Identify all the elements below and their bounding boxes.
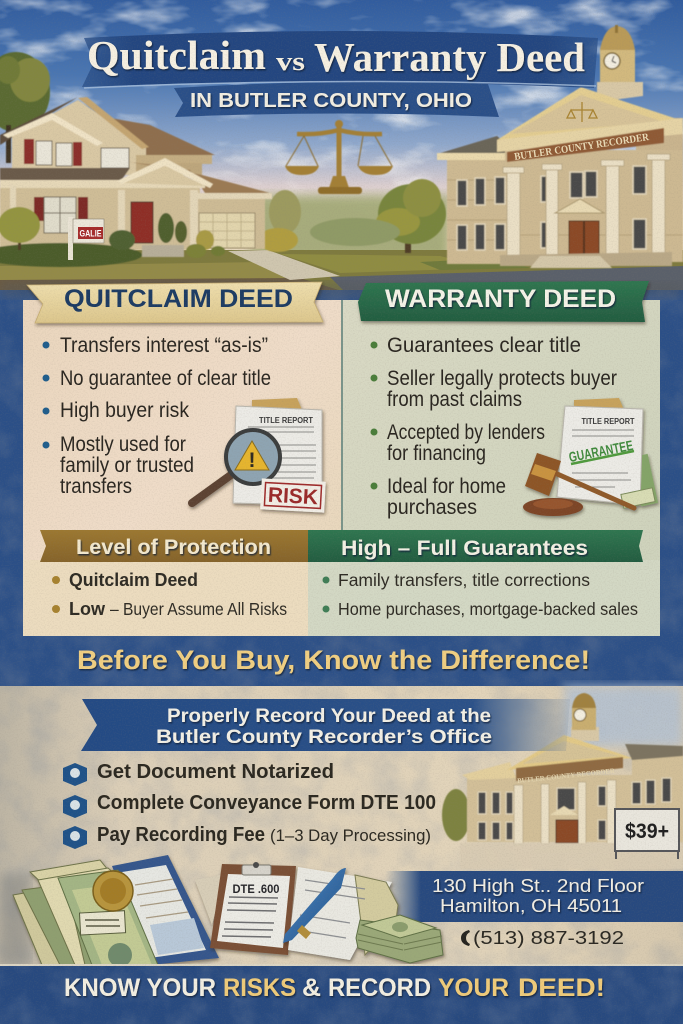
steps list: Pay Recording Fee bbox=[97, 824, 265, 846]
quitclaim bullet list: No guarantee of clear title bbox=[60, 367, 271, 390]
warranty bullet list: Guarantees clear title bbox=[387, 334, 581, 357]
small courthouse illustration bbox=[442, 693, 683, 869]
protection table bbox=[23, 530, 660, 636]
for sale sign bbox=[68, 217, 104, 260]
quitclaim bullet list: transfers bbox=[60, 475, 132, 498]
warranty bullet list bbox=[370, 334, 617, 519]
ribbon: quitclaim deed heading: QUITCLAIM DEED bbox=[64, 285, 293, 313]
quitclaim protection list bbox=[52, 570, 287, 619]
warranty protection list: Family transfers, title corrections bbox=[338, 570, 590, 590]
address band: 130 High St.. 2nd Floor bbox=[432, 876, 644, 896]
quitclaim bullet list: Mostly used for bbox=[60, 433, 186, 456]
panel: warranty deed bbox=[341, 300, 660, 636]
steps list bbox=[63, 761, 436, 849]
icon: step badge bbox=[63, 763, 87, 786]
steps list: Get Document Notarized bbox=[97, 761, 334, 783]
background tree right bbox=[258, 179, 446, 253]
address band bbox=[385, 871, 683, 922]
quitclaim protection list: Quitclaim Deed bbox=[69, 570, 198, 590]
call to action text: & bbox=[302, 974, 321, 1002]
illustration: title report with guarantee and gavel: TITLE REPORT bbox=[582, 417, 635, 426]
right cell lower background bbox=[308, 560, 660, 636]
call to action text: YOUR bbox=[438, 974, 509, 1002]
illustration: title report with magnifier and risk stamp: ! bbox=[248, 449, 256, 472]
title text: Warranty Deed bbox=[314, 34, 585, 80]
title text: Quitclaim bbox=[87, 32, 266, 78]
warranty bullet list: purchases bbox=[387, 496, 477, 519]
steps list: (1–3 Day Processing) bbox=[270, 826, 431, 845]
ribbon: warranty deed heading bbox=[358, 281, 649, 322]
illustration: title report with magnifier and risk stamp: TITLE REPORT bbox=[259, 416, 313, 425]
tagline: Before You Buy, Know the Difference! bbox=[77, 645, 590, 675]
illustration: title report with guarantee and gavel bbox=[523, 398, 658, 516]
icon: scales of justice bbox=[285, 120, 393, 194]
subtitle banner bbox=[84, 81, 596, 117]
title text: vs bbox=[276, 47, 305, 76]
strip: level of protection: Level of Protection bbox=[76, 536, 271, 559]
ribbon: quitclaim deed heading bbox=[27, 282, 323, 323]
icon: step badge bbox=[63, 795, 87, 818]
illustration: clipboard with DTE form: DTE .600 bbox=[232, 884, 280, 896]
strip: high full guarantees bbox=[308, 530, 643, 562]
icon: step badge bbox=[63, 826, 87, 849]
warranty bullet list: for financing bbox=[387, 442, 486, 465]
call to action text: RISKS bbox=[223, 974, 296, 1002]
price sign bbox=[615, 809, 679, 859]
strip: high full guarantees: High – Full Guarantees bbox=[341, 537, 588, 560]
recorder banner bbox=[81, 699, 570, 751]
courthouse illustration bbox=[437, 25, 683, 268]
illustration: money, folder, coin bbox=[13, 855, 219, 967]
quitclaim protection list: Low bbox=[69, 599, 106, 619]
warranty bullet list: Seller legally protects buyer bbox=[387, 367, 617, 390]
quitclaim bullet list: Transfers interest “as-is” bbox=[60, 334, 268, 357]
illustration: clipboard with DTE form bbox=[195, 862, 296, 955]
warranty bullet list: Ideal for home bbox=[387, 475, 506, 498]
header scene: sky and landscape bbox=[0, 0, 683, 300]
background tree left bbox=[0, 52, 50, 163]
steps list: Complete Conveyance Form DTE 100 bbox=[97, 792, 436, 814]
left cell lower background bbox=[23, 560, 308, 636]
recorder banner: Butler County Recorder’s Office bbox=[156, 727, 492, 748]
recorder banner: Properly Record Your Deed at the bbox=[167, 706, 491, 727]
address band: Hamilton, OH 45011 bbox=[440, 896, 622, 916]
quitclaim protection list: – Buyer Assume All Risks bbox=[110, 599, 287, 619]
price sign: $39+ bbox=[625, 820, 669, 843]
warranty bullet list: from past claims bbox=[387, 388, 522, 411]
quitclaim bullet list: family or trusted bbox=[60, 454, 194, 477]
call to action text: KNOW YOUR bbox=[64, 974, 216, 1002]
call to action text bbox=[64, 974, 605, 1002]
illustration: papers, pen and cash bbox=[283, 867, 443, 963]
subtitle banner: IN BUTLER COUNTY, OHIO bbox=[190, 90, 472, 112]
small pediment sign: BUTLER COUNTY RECORDER bbox=[517, 767, 616, 785]
blue background behind comparison bbox=[0, 282, 683, 688]
lower parchment section bbox=[0, 686, 683, 968]
for sale sign: GALIE bbox=[80, 228, 102, 238]
warranty protection list: Home purchases, mortgage-backed sales bbox=[338, 599, 638, 619]
warranty protection list bbox=[322, 570, 638, 619]
illustration: title report with magnifier and risk stamp: RISK bbox=[267, 484, 318, 509]
pediment scales icon bbox=[567, 102, 597, 122]
quitclaim bullet list: High buyer risk bbox=[60, 399, 189, 422]
ribbon: warranty deed heading: WARRANTY DEED bbox=[385, 285, 616, 313]
title text bbox=[87, 32, 585, 80]
warranty bullet list: Accepted by lenders bbox=[387, 421, 545, 444]
strip: level of protection bbox=[40, 530, 308, 562]
quitclaim bullet list bbox=[42, 334, 271, 498]
illustration: title report with guarantee and gavel: GUARANTEE bbox=[567, 437, 634, 465]
title banner bbox=[82, 31, 598, 88]
call to action text: RECORD bbox=[328, 974, 431, 1002]
courthouse sign: BUTLER COUNTY RECORDER bbox=[514, 132, 650, 163]
bottom call to action band bbox=[0, 964, 683, 1024]
phone number: (513) 887-3192 bbox=[473, 928, 624, 948]
call to action text: DEED! bbox=[518, 974, 605, 1002]
panel: quitclaim deed bbox=[23, 300, 342, 636]
illustration: title report with magnifier and risk stamp bbox=[192, 398, 326, 513]
house illustration bbox=[0, 97, 272, 267]
